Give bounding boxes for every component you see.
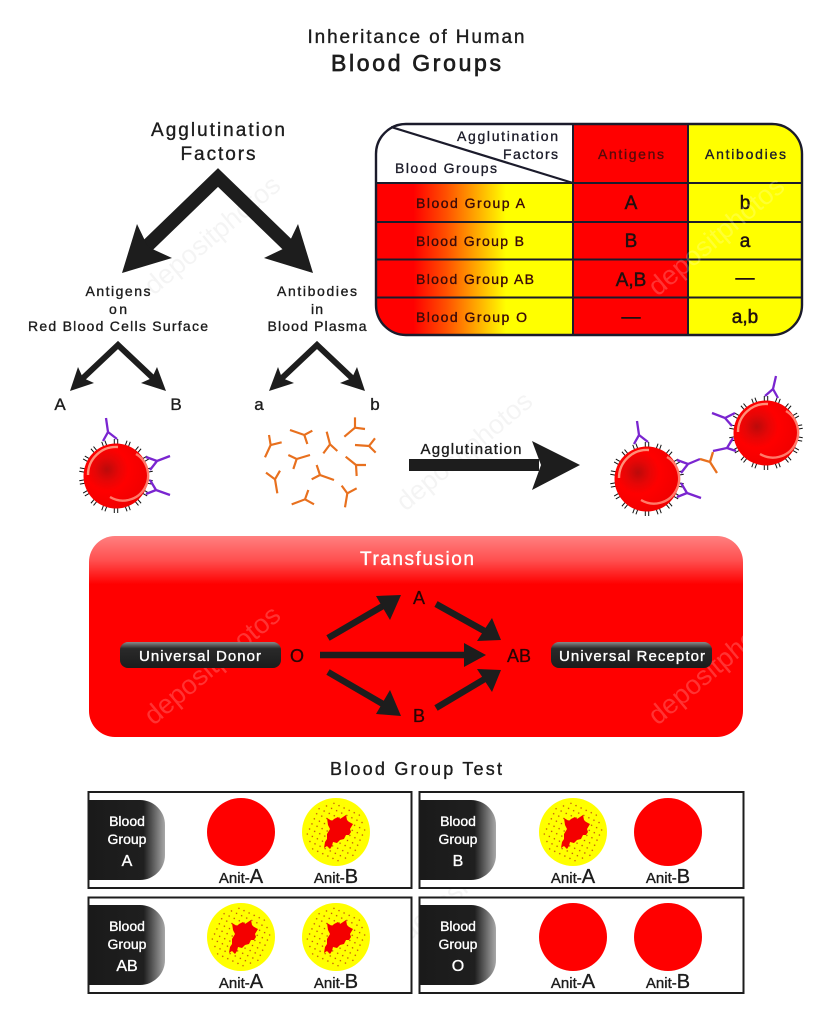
labels: A B a b: a — [254, 395, 264, 414]
table row labels: Blood Group B — [416, 233, 524, 249]
watermark: depositphotos — [390, 386, 538, 517]
tab: group B: Group — [439, 831, 478, 847]
tab: group O: O — [452, 958, 464, 975]
tab: group A — [89, 800, 165, 880]
tab: group O: Group — [439, 936, 478, 952]
table header text: Antigens — [598, 146, 664, 162]
linked antigens — [634, 376, 778, 498]
panel watermark — [138, 600, 790, 731]
watermark: depositphotos — [138, 170, 286, 301]
labels: Anit-B — [314, 971, 358, 993]
arrow: antibody types — [269, 345, 365, 391]
heading: blood group test: Blood Group Test — [330, 759, 502, 779]
table row labels: Blood Group A — [416, 195, 526, 211]
labels — [551, 971, 690, 993]
panel: test group A — [88, 792, 412, 888]
arrow: agglutination factors to antigens and antibodies — [122, 178, 313, 273]
heading: agglutination factors: Agglutination — [151, 120, 285, 141]
pill: universal receptor: Universal Receptor — [559, 648, 705, 665]
icon: free antibodies — [265, 417, 376, 507]
blood group letters: A — [413, 588, 425, 608]
table values: a,b — [732, 307, 758, 328]
tab: group AB: Group — [108, 936, 147, 952]
tab: group AB: AB — [116, 958, 138, 975]
pill: universal receptor — [551, 642, 712, 668]
panel: transfusion — [89, 536, 790, 737]
icon: red blood cell with antigens — [79, 418, 170, 513]
table values: b — [740, 193, 750, 214]
table values: A,B — [616, 270, 646, 291]
tab: group O — [420, 905, 496, 985]
text: antigens on red blood cells surface: Red Blood Cells Surface — [28, 318, 208, 334]
heading: agglutination factors: Factors — [180, 144, 256, 165]
sample: anti-B clumped — [302, 903, 370, 971]
tab: group AB: Blood — [109, 918, 145, 934]
panel: test group O — [420, 898, 744, 993]
arrow: agglutination: Agglutination — [420, 441, 522, 458]
text: antigens on red blood cells surface: on — [109, 301, 127, 317]
tab: group A: A — [122, 853, 133, 870]
title: Inheritance of Human — [308, 27, 524, 48]
sample: anti-B no clumping — [634, 903, 702, 971]
table values: B — [625, 231, 637, 252]
labels: A B a b: b — [370, 395, 380, 414]
antigen branches — [103, 418, 170, 495]
blood group letters: O — [290, 646, 304, 666]
title — [308, 27, 524, 76]
linking antibody — [700, 452, 717, 473]
labels — [219, 866, 358, 888]
table row labels: Blood Group AB — [416, 271, 534, 287]
panel: test group B — [420, 792, 744, 888]
sample: anti-A clumped — [207, 903, 275, 971]
sample: anti-B no clumping — [634, 798, 702, 866]
tab: group B — [420, 800, 496, 880]
tab: group B: Blood — [440, 813, 476, 829]
labels: A B a b: A — [54, 395, 66, 414]
table: blood groups — [376, 124, 802, 335]
table values: — — [736, 268, 754, 289]
blood group letters: AB — [507, 646, 531, 666]
labels: A B a b: B — [170, 395, 182, 414]
text: antibodies in blood plasma: in — [311, 301, 323, 317]
labels: A B a b — [54, 395, 380, 414]
pill: universal donor — [120, 642, 281, 668]
pill: universal donor: Universal Donor — [139, 648, 261, 665]
table header text: Factors — [503, 146, 558, 162]
arrow: antigen types — [70, 345, 166, 391]
watermark — [138, 170, 541, 947]
panel: test group AB — [88, 898, 412, 993]
heading: transfusion: Transfusion — [360, 549, 474, 570]
panel watermark: depositphotos — [138, 600, 286, 731]
labels: Anit-A — [551, 866, 596, 888]
table values: — — [622, 307, 640, 328]
table header text — [395, 128, 786, 176]
text: antigens on red blood cells surface — [28, 283, 208, 334]
tab: group A: Group — [108, 831, 147, 847]
table values: a — [740, 231, 751, 252]
arrow: agglutination — [409, 441, 580, 490]
sample: anti-A no clumping — [539, 903, 607, 971]
table cell fills — [376, 124, 802, 335]
table row labels — [416, 195, 534, 325]
tab: group A: Blood — [109, 813, 145, 829]
text: antibodies in blood plasma — [268, 283, 367, 334]
watermark: depositphotos — [393, 816, 541, 947]
table header text: Agglutination — [457, 128, 558, 144]
title: Blood Groups — [331, 50, 501, 76]
table values: A — [625, 193, 638, 214]
blood group letters — [290, 588, 531, 726]
arrows: donor to receptor — [320, 595, 501, 716]
labels: Anit-A — [219, 971, 264, 993]
panel watermark: depositphotos — [642, 600, 790, 731]
heading: agglutination factors — [151, 120, 285, 165]
labels: Anit-A — [551, 971, 596, 993]
icon: agglutinated red blood cells — [610, 376, 803, 516]
blood group letters: B — [413, 706, 425, 726]
table header text: Antibodies — [705, 146, 786, 162]
table values — [616, 193, 758, 328]
labels — [219, 971, 358, 993]
tab: group B: B — [453, 853, 463, 870]
text: antibodies in blood plasma: Antibodies — [277, 283, 357, 299]
labels: Anit-A — [219, 866, 264, 888]
text: antibodies in blood plasma: Blood Plasma — [268, 318, 367, 334]
tab: group AB — [89, 905, 165, 985]
sample: anti-A clumped — [539, 798, 607, 866]
sample: anti-A no clumping — [207, 798, 275, 866]
sample: anti-B clumped — [302, 798, 370, 866]
tab: group O: Blood — [440, 918, 476, 934]
table row labels: Blood Group O — [416, 309, 527, 325]
text: antigens on red blood cells surface: Antigens — [86, 283, 150, 299]
labels: Anit-B — [646, 971, 690, 993]
table header text: Blood Groups — [395, 160, 497, 176]
labels — [551, 866, 690, 888]
table grid — [376, 124, 802, 335]
labels: Anit-B — [646, 866, 690, 888]
labels: Anit-B — [314, 866, 358, 888]
table watermark: depositphotos — [642, 171, 790, 302]
